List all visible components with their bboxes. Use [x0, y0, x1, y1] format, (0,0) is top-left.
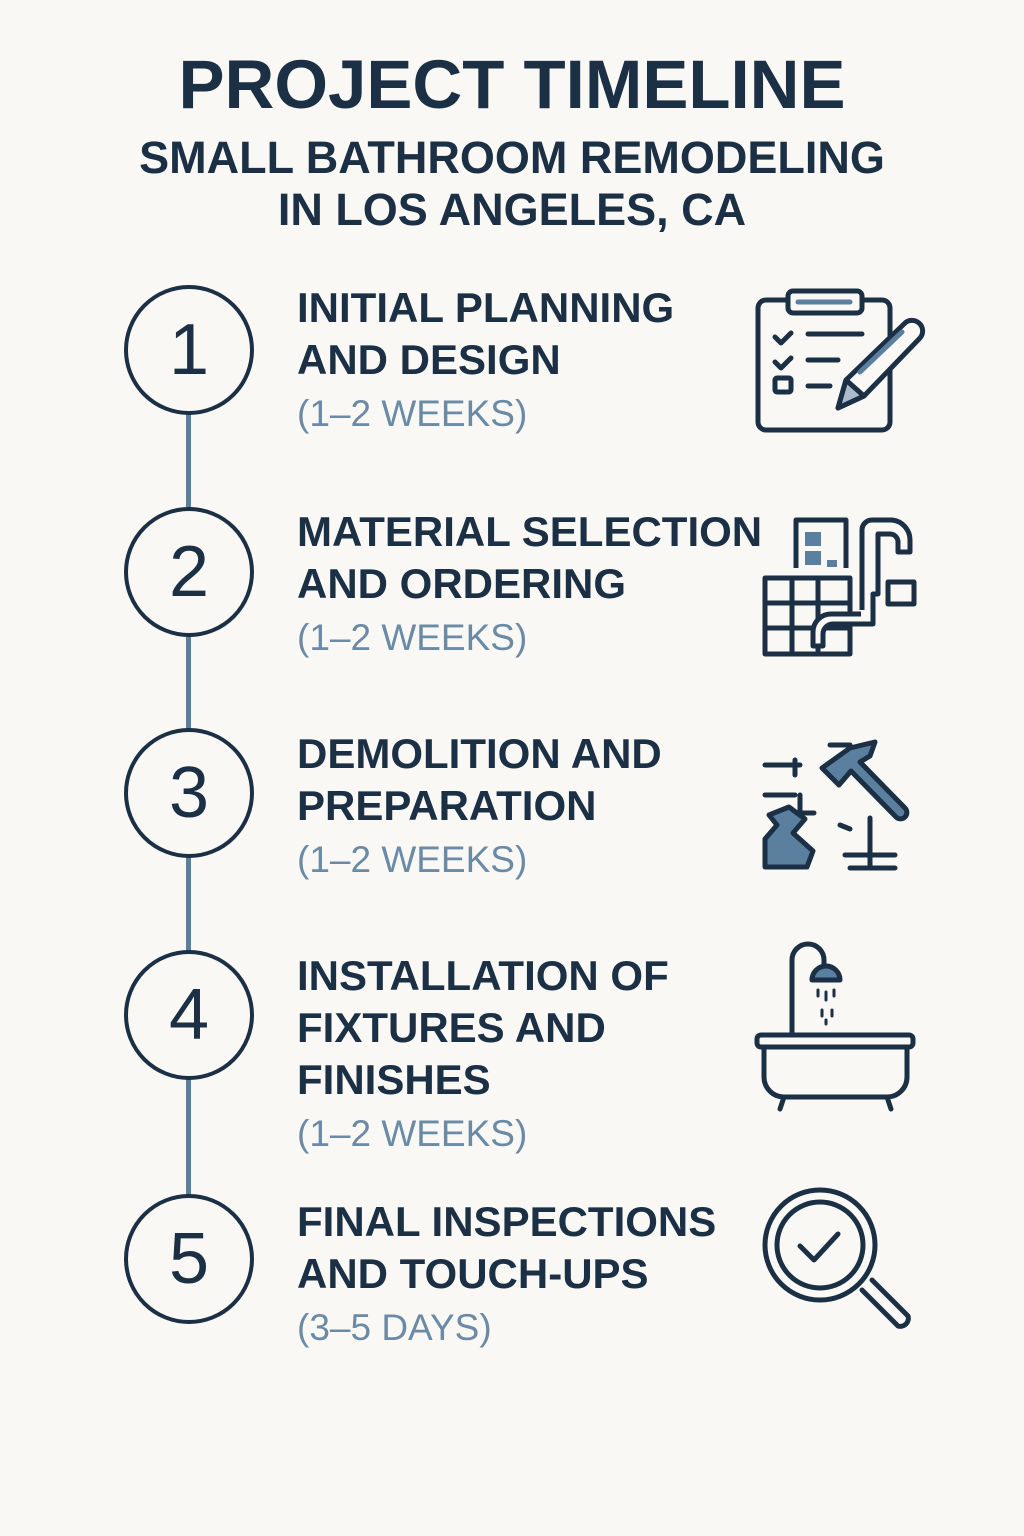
subtitle: SMALL BATHROOM REMODELING	[139, 132, 885, 183]
step 1 text: AND DESIGN	[297, 336, 561, 383]
step 2 text: (1–2 WEEKS)	[297, 617, 527, 658]
circle 5	[124, 1194, 254, 1324]
circle 3	[124, 728, 254, 858]
title: PROJECT TIMELINE	[178, 46, 846, 123]
step 4 text: FINISHES	[297, 1056, 491, 1103]
circle 2	[124, 507, 254, 637]
icon: tiles and faucet	[762, 518, 916, 656]
icon: magnifier check	[762, 1188, 911, 1329]
step 5 text: AND TOUCH-UPS	[297, 1250, 649, 1297]
step 4 text	[297, 952, 669, 1154]
subtitle: IN LOS ANGELES, CA	[278, 184, 746, 235]
step 1 text: (1–2 WEEKS)	[297, 393, 527, 434]
step 4 text: FIXTURES AND	[297, 1004, 606, 1051]
step 5 text	[297, 1198, 716, 1348]
icon: clipboard	[756, 288, 926, 432]
step 5 text: FINAL INSPECTIONS	[297, 1198, 716, 1245]
step 4 text: INSTALLATION OF	[297, 952, 669, 999]
subtitle	[139, 132, 885, 235]
step 2 text: MATERIAL SELECTION	[297, 508, 762, 555]
circle 3: 3	[169, 753, 209, 833]
step 2 text: AND ORDERING	[297, 560, 626, 607]
timeline line	[186, 400, 191, 1200]
circle 5: 5	[169, 1219, 209, 1299]
icon: demolition hammer	[762, 740, 910, 870]
step 3 text: PREPARATION	[297, 782, 596, 829]
step 3 text: DEMOLITION AND	[297, 730, 662, 777]
step 1 text	[297, 284, 674, 434]
step 1 text: INITIAL PLANNING	[297, 284, 674, 331]
icon: bathtub with shower	[754, 942, 916, 1112]
step 3 text: (1–2 WEEKS)	[297, 839, 527, 880]
circle 1: 1	[169, 310, 209, 390]
circle 4	[124, 950, 254, 1080]
step 5 text: (3–5 DAYS)	[297, 1307, 492, 1348]
step 4 text: (1–2 WEEKS)	[297, 1113, 527, 1154]
step 2 text	[297, 508, 762, 658]
circle 1	[124, 285, 254, 415]
circle 4: 4	[169, 975, 209, 1055]
step 3 text	[297, 730, 662, 880]
circle 2: 2	[169, 532, 209, 612]
